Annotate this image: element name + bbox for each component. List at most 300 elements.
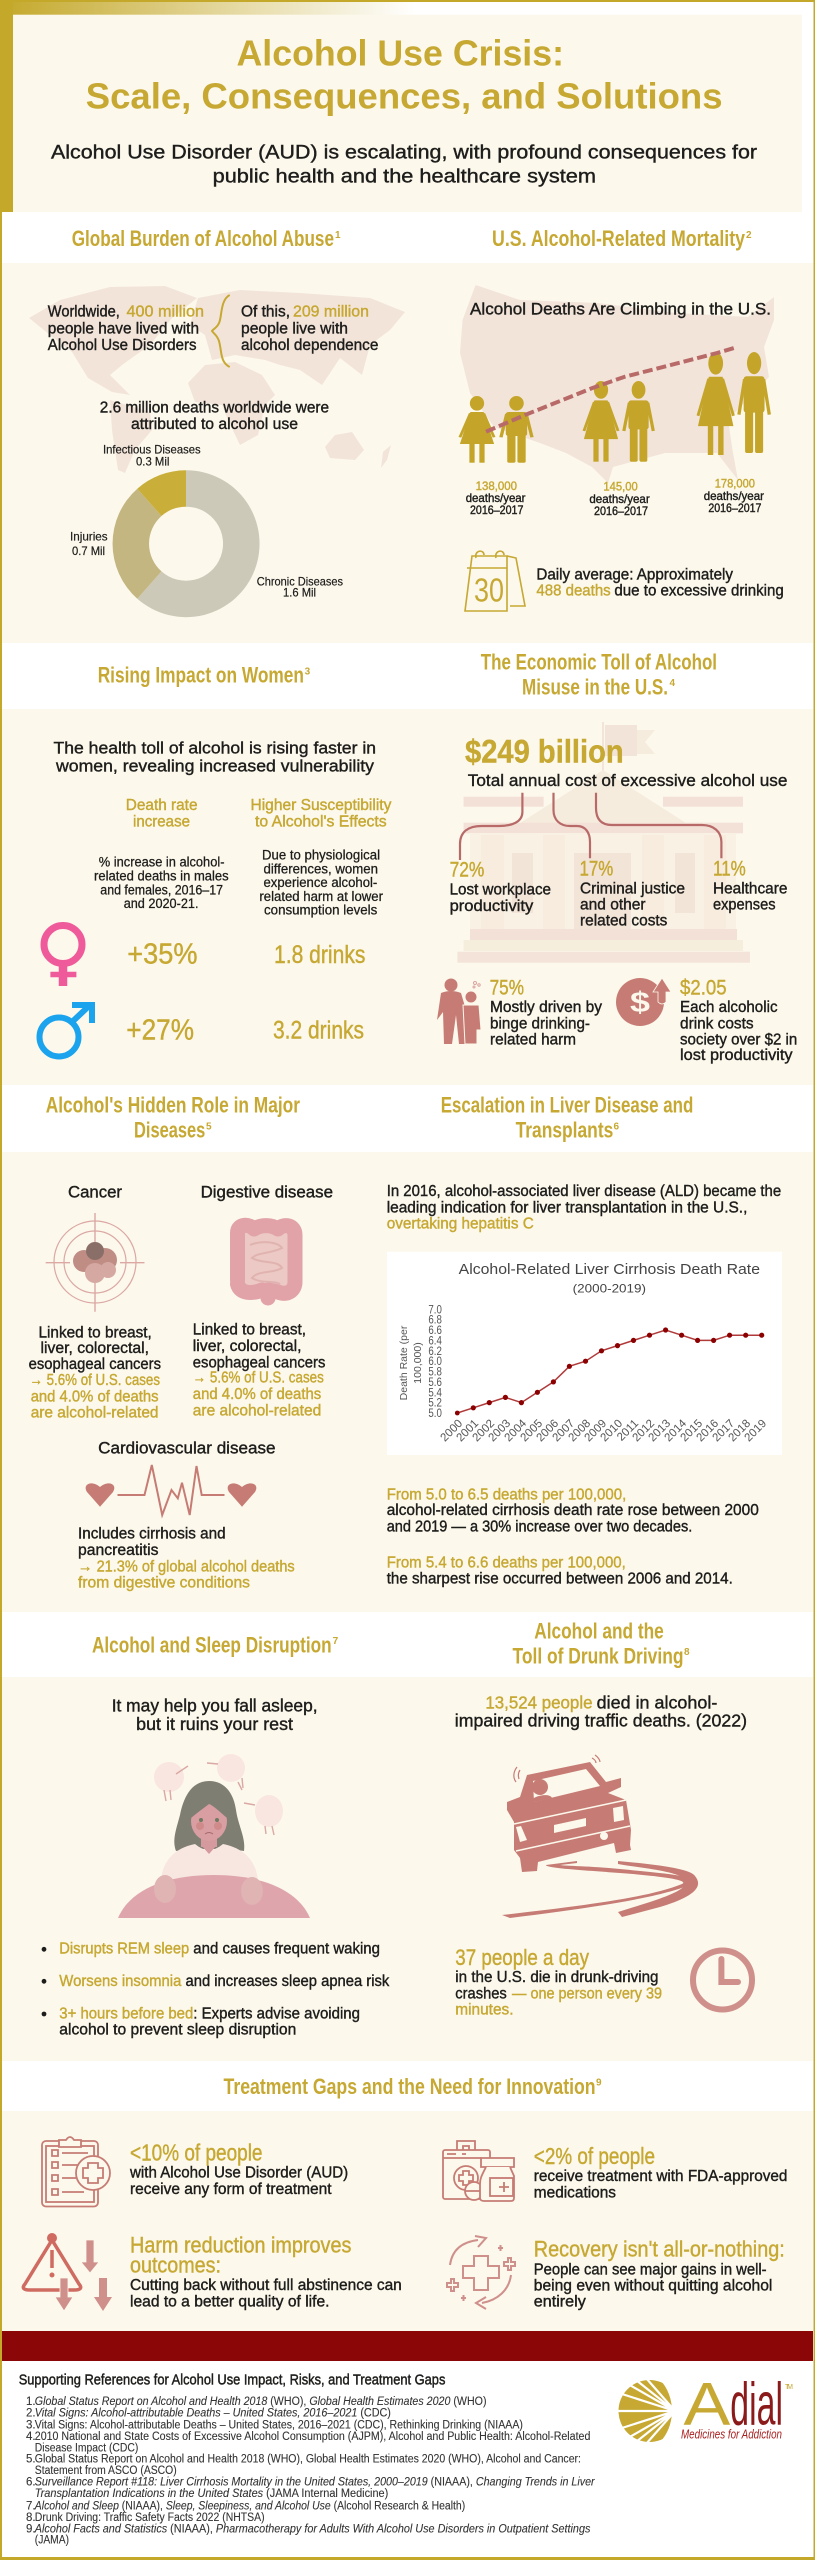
- bullet list: [42, 1940, 390, 2038]
- lead text: but it ruins your rest: [136, 1714, 293, 1734]
- male stats: 3.2 drinks: [273, 1017, 364, 1045]
- panel: hidden role in diseases: [29, 1182, 333, 1592]
- cost: 17%: related costs: [580, 913, 667, 930]
- stat: 209 million: 209 million: [293, 304, 369, 321]
- panel: global burden: [29, 286, 405, 617]
- references list: Vital Signs: Alcohol-attributable Deaths – United States, 2016–2021 (CDC): [35, 2408, 391, 2420]
- lead text: It may help you fall asleep,: [112, 1696, 318, 1716]
- icon: people 2016 group: [460, 396, 532, 463]
- male stats: [126, 1014, 364, 1046]
- text: 37 people a day: crashes: [455, 1985, 507, 2002]
- lead text: [455, 1693, 747, 1731]
- daily average text: due to excessive drinking: [614, 582, 784, 599]
- bullet: REM: [42, 1940, 380, 1957]
- subhead: Total annual cost of excessive alcohol use: [468, 771, 787, 790]
- cost: 17%: 17%: [580, 857, 613, 880]
- x axis: 2000: [439, 1418, 465, 1444]
- references list: 1.: [26, 2396, 36, 2408]
- subtitle: public health and the healthcare system: [213, 165, 596, 187]
- references list: 6.: [26, 2477, 36, 2489]
- text: <2%: medications: [534, 2184, 616, 2201]
- x axis: 2003: [487, 1418, 513, 1444]
- title: Alcohol Use Crisis:: [236, 33, 564, 74]
- text: recovery: Recovery isn't all-or-nothing:: [534, 2237, 785, 2262]
- bullet: 3+ hours: [42, 2006, 360, 2038]
- references list: [26, 2396, 596, 2547]
- bullet: REM: and causes frequent waking: [193, 1940, 380, 1957]
- text: <10%: receive any form of treatment: [130, 2181, 332, 2198]
- text: 5.4 to 6.6: From 5.4 to 6.6 deaths per 100,000,: [387, 1554, 626, 1571]
- icon: dollar: $: [630, 987, 650, 1019]
- stat: $2.05: lost productivity: [680, 1047, 793, 1064]
- x axis: 2007: [551, 1418, 577, 1444]
- text: 37 people a day: — one person every 39: [512, 1985, 662, 2002]
- references list: Transplantation Indications in the United States (JAMA Internal Medicine): [35, 2488, 388, 2500]
- cancer text: → 5.6% of U.S. cases: [30, 1372, 160, 1389]
- text: harm reduction: outcomes:: [130, 2253, 221, 2278]
- intro text: [387, 1183, 781, 1233]
- label: 145,00: [589, 480, 650, 518]
- description: physiological: [259, 848, 383, 918]
- female stats: 1.8 drinks: [274, 941, 365, 969]
- text: recovery: [534, 2237, 785, 2311]
- label: 145,00: 145,00: [603, 480, 638, 494]
- stat: 75%: related harm: [490, 1032, 576, 1049]
- references list: 5.: [26, 2454, 36, 2466]
- column heading: death rate: increase: [133, 814, 190, 831]
- lead text: [54, 738, 376, 776]
- x axis: 2017: [711, 1418, 737, 1444]
- cost: 11%: expenses: [713, 896, 776, 913]
- text: 2.6 million deaths: [100, 400, 329, 433]
- logo wordmark: TM: [785, 2384, 793, 2391]
- cardiovascular text: → 21.3% of global alcohol deaths: [78, 1558, 295, 1575]
- heading text: Alcohol Deaths Are Climbing in the U.S.: [470, 300, 771, 318]
- x axis: 2013: [647, 1418, 673, 1444]
- column heading: susceptibility: [250, 797, 392, 831]
- x axis: 2019: [743, 1418, 769, 1444]
- logo wordmark: Medicines for Addiction: [681, 2427, 782, 2441]
- female stats: [127, 938, 365, 970]
- text: <10%: with Alcohol Use Disorder (AUD): [129, 2165, 348, 2182]
- x axis: 2015: [679, 1418, 705, 1444]
- heading: Escalation: 6: [614, 1122, 620, 1132]
- donut labels: Chronic Diseases: [257, 574, 343, 588]
- stat: 75%: 75%: [490, 976, 524, 999]
- donut labels: [70, 442, 343, 600]
- cardiovascular text: from digestive conditions: [78, 1575, 250, 1592]
- description: percent increase: % increase in alcohol-: [99, 855, 224, 870]
- heading: Escalation: [441, 1093, 693, 1143]
- cost: 72%: 72%: [450, 859, 484, 882]
- x axis: 2011: [615, 1418, 641, 1444]
- heading: U.S. Alcohol-Related Mortality: U.S. Alcohol-Related Mortality: [492, 226, 746, 251]
- panel: liver disease: [387, 1183, 782, 1587]
- panel: drunk driving: [455, 1693, 752, 2019]
- icon: calendar: [465, 551, 525, 611]
- text: harm reduction: lead to a better quality of life.: [130, 2293, 330, 2310]
- text: harm reduction: [130, 2233, 402, 2310]
- references list: 2.: [26, 2408, 36, 2420]
- lead text: 13,524 people: [485, 1693, 592, 1713]
- text: 37 people a day: in the U.S. die in drunk-driving: [455, 1969, 658, 1986]
- label: 178,000: 2016–2017: [708, 501, 762, 515]
- daily average text: Daily average: Approximately: [536, 566, 733, 583]
- female stats: +35%: [127, 938, 198, 970]
- references heading: Supporting References for Alcohol Use Impact, Risks, and Treatment Gaps: [19, 2372, 445, 2388]
- bullet: insomnia: and increases sleep apnea risk: [186, 1973, 390, 1990]
- label: 138,000: 138,000: [476, 479, 517, 493]
- y axis: [398, 1304, 442, 1420]
- references list: Alcohol and Sleep (NIAAA), Sleep, Sleepiness, and Alcohol Use (Alcohol Research & Health): [34, 2500, 465, 2512]
- bullet: 3+ hours: : Experts advise avoiding: [193, 2006, 360, 2023]
- column heading: susceptibility: Higher Susceptibility: [250, 797, 392, 814]
- chart title: Alcohol-Related Liver Cirrhosis Death Rate: [459, 1261, 760, 1278]
- daily average text: [536, 566, 784, 599]
- cancer text: [29, 1324, 161, 1422]
- intro text: overtaking hepatitis C: [387, 1216, 534, 1233]
- description: percent increase: and 2020-21.: [124, 896, 198, 911]
- text: recovery: entirely: [534, 2294, 586, 2311]
- cost: 17%: [580, 857, 685, 930]
- y axis: 5.8: [428, 1366, 442, 1378]
- references list: Global Status Report on Alcohol and Health 2018 (WHO), Global Health Estimates 2020 (WHO): [35, 2396, 487, 2408]
- icon: clipboard: [42, 2137, 110, 2206]
- references list: Global Status Report on Alcohol and Health 2018 (WHO), Global Health Estimates 2020 (WHO), Alcohol and Cancer:: [35, 2454, 581, 2466]
- heading: Escalation: Escalation in Liver Disease and: [441, 1093, 693, 1118]
- y axis: 5.6: [428, 1377, 442, 1389]
- bullet: insomnia: [42, 1973, 390, 1990]
- text: 5.4 to 6.6: [387, 1554, 733, 1587]
- references list: Drunk Driving: Traffic Safety Facts 2022 (NHTSA): [35, 2512, 265, 2524]
- text: <2%: <2% of people: [534, 2143, 655, 2169]
- icon: tumor target: [46, 1213, 145, 1312]
- stat: 209 million: alcohol dependence: [241, 337, 378, 354]
- intro text: leading indication for liver transplantation in the U.S.,: [387, 1199, 747, 1216]
- icon: female symbol: [44, 926, 82, 986]
- text: 2.6 million deaths: attributed to alcohol use: [131, 416, 298, 433]
- subtitle: [51, 141, 758, 187]
- description: percent increase: [94, 855, 229, 911]
- y axis: 100,000): [412, 1342, 424, 1384]
- references list: 2010 National and State Costs of Excessive Alcohol Consumption (AJPM), Alcohol and Public Health: Alcohol-Related: [35, 2431, 590, 2443]
- x axis: 2005: [519, 1418, 545, 1444]
- text: 5.0 to 6.5: alcohol-related cirrhosis death rate rose between 2000: [387, 1502, 759, 1519]
- digestive text: Linked to breast,: [193, 1322, 306, 1339]
- big number: $249 billion: [465, 734, 624, 770]
- references list: 3.: [26, 2420, 36, 2432]
- cancer text: are alcohol-related: [31, 1405, 159, 1422]
- text: 5.0 to 6.5: and 2019 — a 30% increase over two decades.: [387, 1518, 692, 1535]
- cancer block: [29, 1182, 161, 1422]
- text: <10%: [129, 2140, 348, 2198]
- bullet: 3+ hours: alcohol to prevent sleep disruption: [59, 2021, 296, 2038]
- text: harm reduction: Harm reduction improves: [130, 2233, 351, 2258]
- US map background: [460, 285, 774, 483]
- heading: Sleep Disruption: 7: [333, 1636, 339, 1647]
- text: <2%: receive treatment with FDA-approved: [534, 2168, 787, 2185]
- cost: 72%: [450, 859, 551, 915]
- panel: rising impact on women: [40, 738, 392, 1056]
- label: 145,00: 2016–2017: [594, 504, 648, 518]
- cancer text: and 4.0% of deaths: [31, 1388, 159, 1405]
- cardiovascular text: [78, 1526, 295, 1592]
- cancer text: esophageal cancers: [29, 1356, 161, 1373]
- stat: $2.05: drink costs: [680, 1015, 754, 1032]
- cost: 11%: 11%: [713, 857, 746, 880]
- y axis: 6.4: [428, 1335, 442, 1347]
- heading: Economic Toll: [481, 649, 717, 699]
- lead text: women, revealing increased vulnerability: [55, 757, 375, 776]
- digestive block: [193, 1182, 333, 1419]
- references list: Statement from ASCO (ASCO): [35, 2465, 177, 2477]
- heading: U.S. Alcohol-Related Mortality: 2: [746, 230, 752, 241]
- text: harm reduction: Cutting back without full abstinence can: [130, 2277, 402, 2294]
- x axis: 2009: [583, 1418, 609, 1444]
- text: 37 people a day: [455, 1945, 662, 2019]
- x axis: 2006: [535, 1418, 561, 1444]
- subtitle: Alcohol Use Disorder (AUD) is escalating, with profound consequences for: [51, 141, 758, 163]
- y axis: 5.2: [428, 1398, 442, 1410]
- stat: $2.05: [680, 976, 797, 1064]
- icon: two people: [437, 978, 481, 1044]
- heading: Drunk Driving: 8: [684, 1647, 690, 1658]
- cardiovascular text: Includes cirrhosis and: [78, 1526, 226, 1543]
- donut labels: Injuries: [70, 530, 108, 544]
- icon: medications: [443, 2141, 514, 2201]
- title: [86, 33, 723, 116]
- description: physiological: consumption levels: [264, 903, 378, 918]
- text: recovery: being even without quitting alcohol: [534, 2277, 772, 2294]
- digestive text: liver, colorectal,: [193, 1338, 302, 1355]
- cancer text: liver, colorectal,: [40, 1340, 149, 1357]
- heading: Drunk Driving: Toll of Drunk Driving: [512, 1643, 684, 1668]
- x axis: 2018: [727, 1418, 753, 1444]
- column heading: death rate: Death rate: [126, 797, 198, 814]
- x axis: 2010: [599, 1418, 625, 1444]
- text: 5.0 to 6.5: [387, 1487, 759, 1535]
- header panel: [0, 0, 802, 212]
- chart title: (2000-2019): [573, 1281, 646, 1295]
- logo: Adial: [618, 2370, 793, 2444]
- column heading: susceptibility: to Alcohol's Effects: [255, 814, 387, 831]
- heading: Hidden Role: Diseases: [134, 1118, 205, 1143]
- column heading: death rate: [126, 797, 198, 831]
- cost: 17%: Criminal justice: [580, 880, 685, 897]
- connector lines: [460, 793, 721, 860]
- stat: 400 million: Worldwide,: [48, 304, 120, 321]
- icon: recovery cross: [447, 2236, 515, 2309]
- cost: 72%: Lost workplace: [450, 882, 551, 899]
- x axis: 2016: [695, 1418, 721, 1444]
- logo sunburst: [618, 2378, 681, 2444]
- description: percent increase: and females, 2016–17: [100, 882, 223, 897]
- references list: 8.: [26, 2512, 36, 2524]
- logo wordmark: [681, 2370, 793, 2441]
- line chart: [387, 1252, 782, 1455]
- text: recovery: People can see major gains in well-: [534, 2262, 767, 2279]
- world map background: [29, 286, 405, 473]
- description: physiological: differences, women: [264, 861, 378, 876]
- data line: [455, 1327, 764, 1415]
- icon: calendar: 30: [474, 572, 504, 609]
- text: <2%: [534, 2143, 787, 2201]
- cancer text: Linked to breast,: [38, 1324, 152, 1341]
- stat: 400 million: Alcohol Use Disorders: [48, 337, 197, 354]
- x axis: 2012: [631, 1418, 657, 1444]
- chart title: [459, 1261, 760, 1295]
- stat: 400 million: people have lived with: [48, 320, 199, 338]
- text: 37 people a day: 37 people a day: [455, 1945, 589, 1970]
- icon: intestine: [238, 1225, 295, 1298]
- label: 178,000: 178,000: [715, 476, 755, 490]
- text: 37 people a day: minutes.: [455, 2002, 514, 2019]
- y axis: 6.2: [428, 1346, 442, 1358]
- panel: sleep: [42, 1696, 390, 2038]
- references list: (JAMA): [35, 2535, 69, 2547]
- heading: Drunk Driving: Alcohol and the: [534, 1618, 664, 1643]
- y axis: 6.6: [428, 1325, 442, 1337]
- icon: warning and down arrows: [23, 2233, 112, 2311]
- x axis: 2002: [471, 1418, 497, 1444]
- heading: Sleep Disruption: Alcohol and Sleep Disruption: [92, 1632, 332, 1657]
- heading: Hidden Role: Alcohol's Hidden Role in Major: [46, 1093, 300, 1118]
- cost: 72%: productivity: [450, 898, 533, 915]
- stat: 209 million: people live with: [241, 320, 348, 338]
- illustration: swerving car: [502, 1755, 698, 1918]
- lead text: died in alcohol-: [597, 1693, 717, 1713]
- references list: Disease Impact (CDC): [35, 2442, 138, 2454]
- label: 138,000: deaths/year: [466, 491, 526, 505]
- digestive text: [193, 1322, 326, 1419]
- references: [19, 2372, 596, 2547]
- dark red band: [2, 2331, 813, 2361]
- cardiovascular text: pancreatitis: [78, 1542, 159, 1559]
- x axis: 2008: [567, 1418, 593, 1444]
- cancer title: Cancer: [68, 1182, 122, 1201]
- trend line: [486, 348, 734, 432]
- label: 178,000: [704, 476, 764, 515]
- panel: treatment gaps: [23, 2137, 787, 2311]
- heading: Drunk Driving: [512, 1618, 690, 1668]
- digestive text: and 4.0% of deaths: [193, 1386, 321, 1403]
- x axis: 2004: [503, 1417, 530, 1444]
- description: physiological: experience alcohol-: [264, 875, 377, 890]
- stat: 75%: Mostly driven by: [490, 999, 602, 1016]
- y axis: 7.0: [428, 1304, 442, 1316]
- heading: Rising Impact on Women: Rising Impact on Women: [98, 663, 304, 688]
- icon: male symbol: [40, 1005, 92, 1056]
- heading: Hidden Role: [46, 1093, 300, 1143]
- bullet: REM: Disrupts REM sleep: [59, 1940, 189, 1957]
- digestive text: are alcohol-related: [193, 1402, 321, 1419]
- heading: Treatment Gaps: Treatment Gaps and the Need for Innovation: [224, 2074, 596, 2099]
- y axis: 6.8: [428, 1315, 442, 1327]
- x axis: [439, 1417, 769, 1444]
- stat: 75%: [490, 976, 602, 1049]
- y axis: 5.4: [428, 1387, 442, 1399]
- stat: $2.05: Each alcoholic: [680, 999, 778, 1016]
- icon: clock: [693, 1950, 752, 2010]
- donut chart: [113, 470, 260, 617]
- icon: brace: [212, 295, 230, 367]
- heading: Global Burden of Alcohol Abuse: 1: [335, 230, 341, 241]
- label: 138,000: [466, 479, 526, 517]
- heading: Economic Toll: The Economic Toll of Alcohol: [481, 649, 717, 674]
- heading: Economic Toll: Misuse in the U.S.: [522, 674, 668, 699]
- donut labels: 0.3 Mil: [136, 454, 169, 468]
- intro text: In 2016, alcohol-associated liver disease (ALD) became the: [387, 1183, 781, 1200]
- stat: 400 million: [48, 304, 204, 354]
- stat: $2.05: society over $2 in: [680, 1032, 797, 1049]
- description: physiological: related harm at lower: [259, 889, 383, 904]
- cost: 17%: and other: [580, 896, 646, 913]
- title: Scale, Consequences, and Solutions: [86, 75, 723, 116]
- y axis: 5.0: [428, 1408, 442, 1420]
- lead text: [112, 1696, 318, 1734]
- illustration: building: [457, 722, 750, 963]
- digestive title: Digestive disease: [201, 1182, 333, 1201]
- bullet: insomnia: Worsens insomnia: [59, 1973, 182, 1990]
- cardiovascular title: Cardiovascular disease: [98, 1438, 276, 1457]
- logo wordmark: A: [684, 2370, 730, 2437]
- digestive text: → 5.6% of U.S. cases: [193, 1370, 324, 1387]
- cost: 11%: Healthcare: [713, 880, 787, 897]
- x axis: 2001: [455, 1418, 481, 1444]
- icon: people second group: [584, 381, 653, 462]
- stat: $2.05: $2.05: [680, 976, 727, 999]
- heading: Treatment Gaps: 9: [596, 2078, 602, 2088]
- heading: Escalation: Transplants: [516, 1118, 613, 1143]
- stat: 209 million: Of this,: [241, 304, 290, 321]
- icon: hearts and ECG: [86, 1465, 256, 1515]
- stat: 209 million: [241, 304, 378, 354]
- stat: 75%: binge drinking-: [490, 1015, 590, 1032]
- text: <10%: <10% of people: [130, 2140, 262, 2166]
- stat: 400 million: 400 million: [126, 304, 204, 321]
- cardiovascular block: [78, 1438, 295, 1592]
- text: 5.0 to 6.5: From 5.0 to 6.5 deaths per 100,000,: [387, 1487, 626, 1504]
- digestive text: esophageal cancers: [193, 1354, 326, 1371]
- y axis: 6.0: [428, 1356, 442, 1368]
- references list: 7.: [26, 2500, 36, 2512]
- label: 178,000: deaths/year: [704, 489, 764, 503]
- panel: economic toll: [437, 722, 797, 1064]
- label: 145,00: deaths/year: [589, 492, 650, 506]
- lead text: The health toll of alcohol is rising faster in: [54, 738, 376, 757]
- donut labels: Infectious Diseases: [103, 442, 201, 456]
- heading: Global Burden of Alcohol Abuse: Global Burden of Alcohol Abuse: [72, 226, 334, 251]
- references list: 4.: [26, 2431, 36, 2443]
- icon: dollar: [616, 978, 671, 1026]
- panel: U.S. mortality: [460, 285, 784, 611]
- x axis: 2014: [663, 1417, 690, 1444]
- heading: Rising Impact on Women: 3: [305, 666, 311, 678]
- donut labels: 1.6 Mil: [283, 586, 316, 600]
- bullet: 3+ hours: 3+ hours before bed: [59, 2006, 193, 2023]
- references list: Alcohol Facts and Statistics (NIAAA), Pharmacotherapy for Adults With Alcohol Use Disorders in Outpatient Settings: [34, 2523, 591, 2535]
- description: physiological: Due to physiological: [262, 848, 380, 863]
- references list: 9.: [26, 2523, 36, 2535]
- cost: 11%: [713, 857, 787, 913]
- description: percent increase: related deaths in males: [94, 869, 229, 884]
- donut labels: 0.7 Mil: [72, 544, 105, 558]
- text: 5.4 to 6.6: the sharpest rise occurred between 2006 and 2014.: [387, 1570, 733, 1587]
- illustration: sleepless woman: [118, 1754, 310, 1918]
- label: 138,000: 2016–2017: [470, 503, 524, 517]
- icon: people third group: [698, 352, 769, 455]
- male stats: +27%: [126, 1014, 194, 1046]
